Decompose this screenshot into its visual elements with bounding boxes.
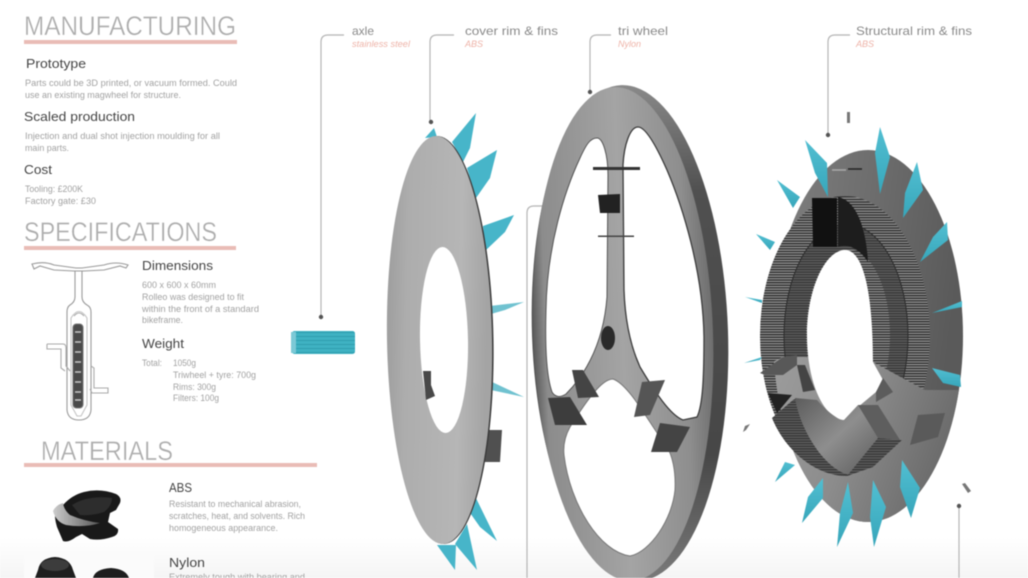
text block: prototype xyxy=(25,56,237,100)
text block: dimensions: Rolleo was designed to fit xyxy=(142,292,244,302)
panel: manufacturing xyxy=(24,11,237,206)
text block: weight: Weight xyxy=(142,336,184,351)
text block: cost: Factory gate: £30 xyxy=(25,196,96,206)
callout leader: tri wheel lower xyxy=(527,204,582,578)
mounts behind cover xyxy=(484,430,502,462)
text block: weight xyxy=(142,336,256,403)
hub and spokes xyxy=(548,167,690,452)
icon: Nylon samples xyxy=(24,553,154,578)
lower window xyxy=(564,379,675,556)
text block: scaled production: Scaled production xyxy=(24,109,135,124)
heading: specifications: SPECIFICATIONS xyxy=(24,217,217,247)
cover rim and fins part xyxy=(383,113,524,570)
text block: ABS: homogeneous appearance. xyxy=(169,523,278,533)
text block: dimensions: bikeframe. xyxy=(142,315,183,325)
fins: structural xyxy=(744,127,962,547)
label: axle xyxy=(319,24,411,319)
label: axle: stainless steel xyxy=(352,39,411,49)
label: structural rim and fins: ABS xyxy=(855,39,874,49)
screws xyxy=(743,112,971,493)
structural rim and fins part xyxy=(744,127,965,547)
axle part xyxy=(291,331,355,354)
label: structural rim and fins: Structural rim & fins xyxy=(856,24,972,38)
text block: prototype: Prototype xyxy=(26,56,86,71)
text block: prototype: Parts could be 3D printed, or vacuum formed. Could xyxy=(25,78,237,88)
label: cover rim and fins: cover rim & fins xyxy=(465,24,558,38)
label: structural rim and fins xyxy=(826,24,972,137)
label: cover rim and fins: ABS xyxy=(464,39,483,49)
text block: prototype: use an existing magwheel for structure. xyxy=(25,90,181,100)
text block: dimensions: 600 x 600 x 60mm xyxy=(142,280,216,290)
text block: scaled production xyxy=(24,109,220,153)
upper duct xyxy=(812,198,837,247)
text block: dimensions: Dimensions xyxy=(142,258,214,273)
text block: Nylon: Nylon xyxy=(169,555,205,570)
hatched outer band xyxy=(760,196,930,476)
text block: ABS: Resistant to mechanical abrasion, xyxy=(169,499,301,509)
tri wheel part xyxy=(523,82,737,578)
text block: ABS xyxy=(169,480,305,533)
lower disc overlay xyxy=(774,356,958,522)
text block: Nylon xyxy=(169,555,305,578)
label: cover rim and fins xyxy=(429,24,558,124)
panel: specifications xyxy=(24,217,259,420)
text block: dimensions: within the front of a standard xyxy=(141,304,259,314)
text block: cost: Cost xyxy=(24,162,52,177)
text block: weight: Total: xyxy=(142,358,162,368)
text block: weight: Rims: 300g xyxy=(173,382,216,392)
label: tri wheel: Nylon xyxy=(618,39,641,49)
fins: cover xyxy=(425,113,524,570)
upper right window xyxy=(623,127,704,420)
text block: scaled production: main parts. xyxy=(25,143,69,153)
text block: ABS: scratches, heat, and solvents. Rich xyxy=(169,511,305,521)
label: tri wheel xyxy=(588,24,668,94)
icon: bike front view xyxy=(32,263,128,420)
text block: weight: 1050g xyxy=(173,358,196,368)
panel: materials xyxy=(24,436,317,578)
heading: materials: MATERIALS xyxy=(41,436,173,466)
text block: ABS: ABS xyxy=(169,480,192,495)
heading: manufacturing: MANUFACTURING xyxy=(24,11,236,41)
text block: cost: Tooling: £200K xyxy=(25,184,83,194)
lower ducts and ribs xyxy=(760,169,945,476)
text block: dimensions xyxy=(141,258,259,325)
callout leader: bottom right xyxy=(957,504,961,578)
icon: ABS sample xyxy=(53,490,120,542)
label: tri wheel: tri wheel xyxy=(618,24,668,38)
centre hole xyxy=(807,250,883,420)
text block: cost xyxy=(24,162,96,206)
text block: scaled production: Injection and dual shot injection moulding for all xyxy=(25,131,220,141)
text block: weight: Filters: 100g xyxy=(173,393,219,403)
upper left window xyxy=(546,138,608,396)
label: axle: axle xyxy=(352,24,374,38)
text block: weight: Triwheel + tyre: 700g xyxy=(173,370,256,380)
